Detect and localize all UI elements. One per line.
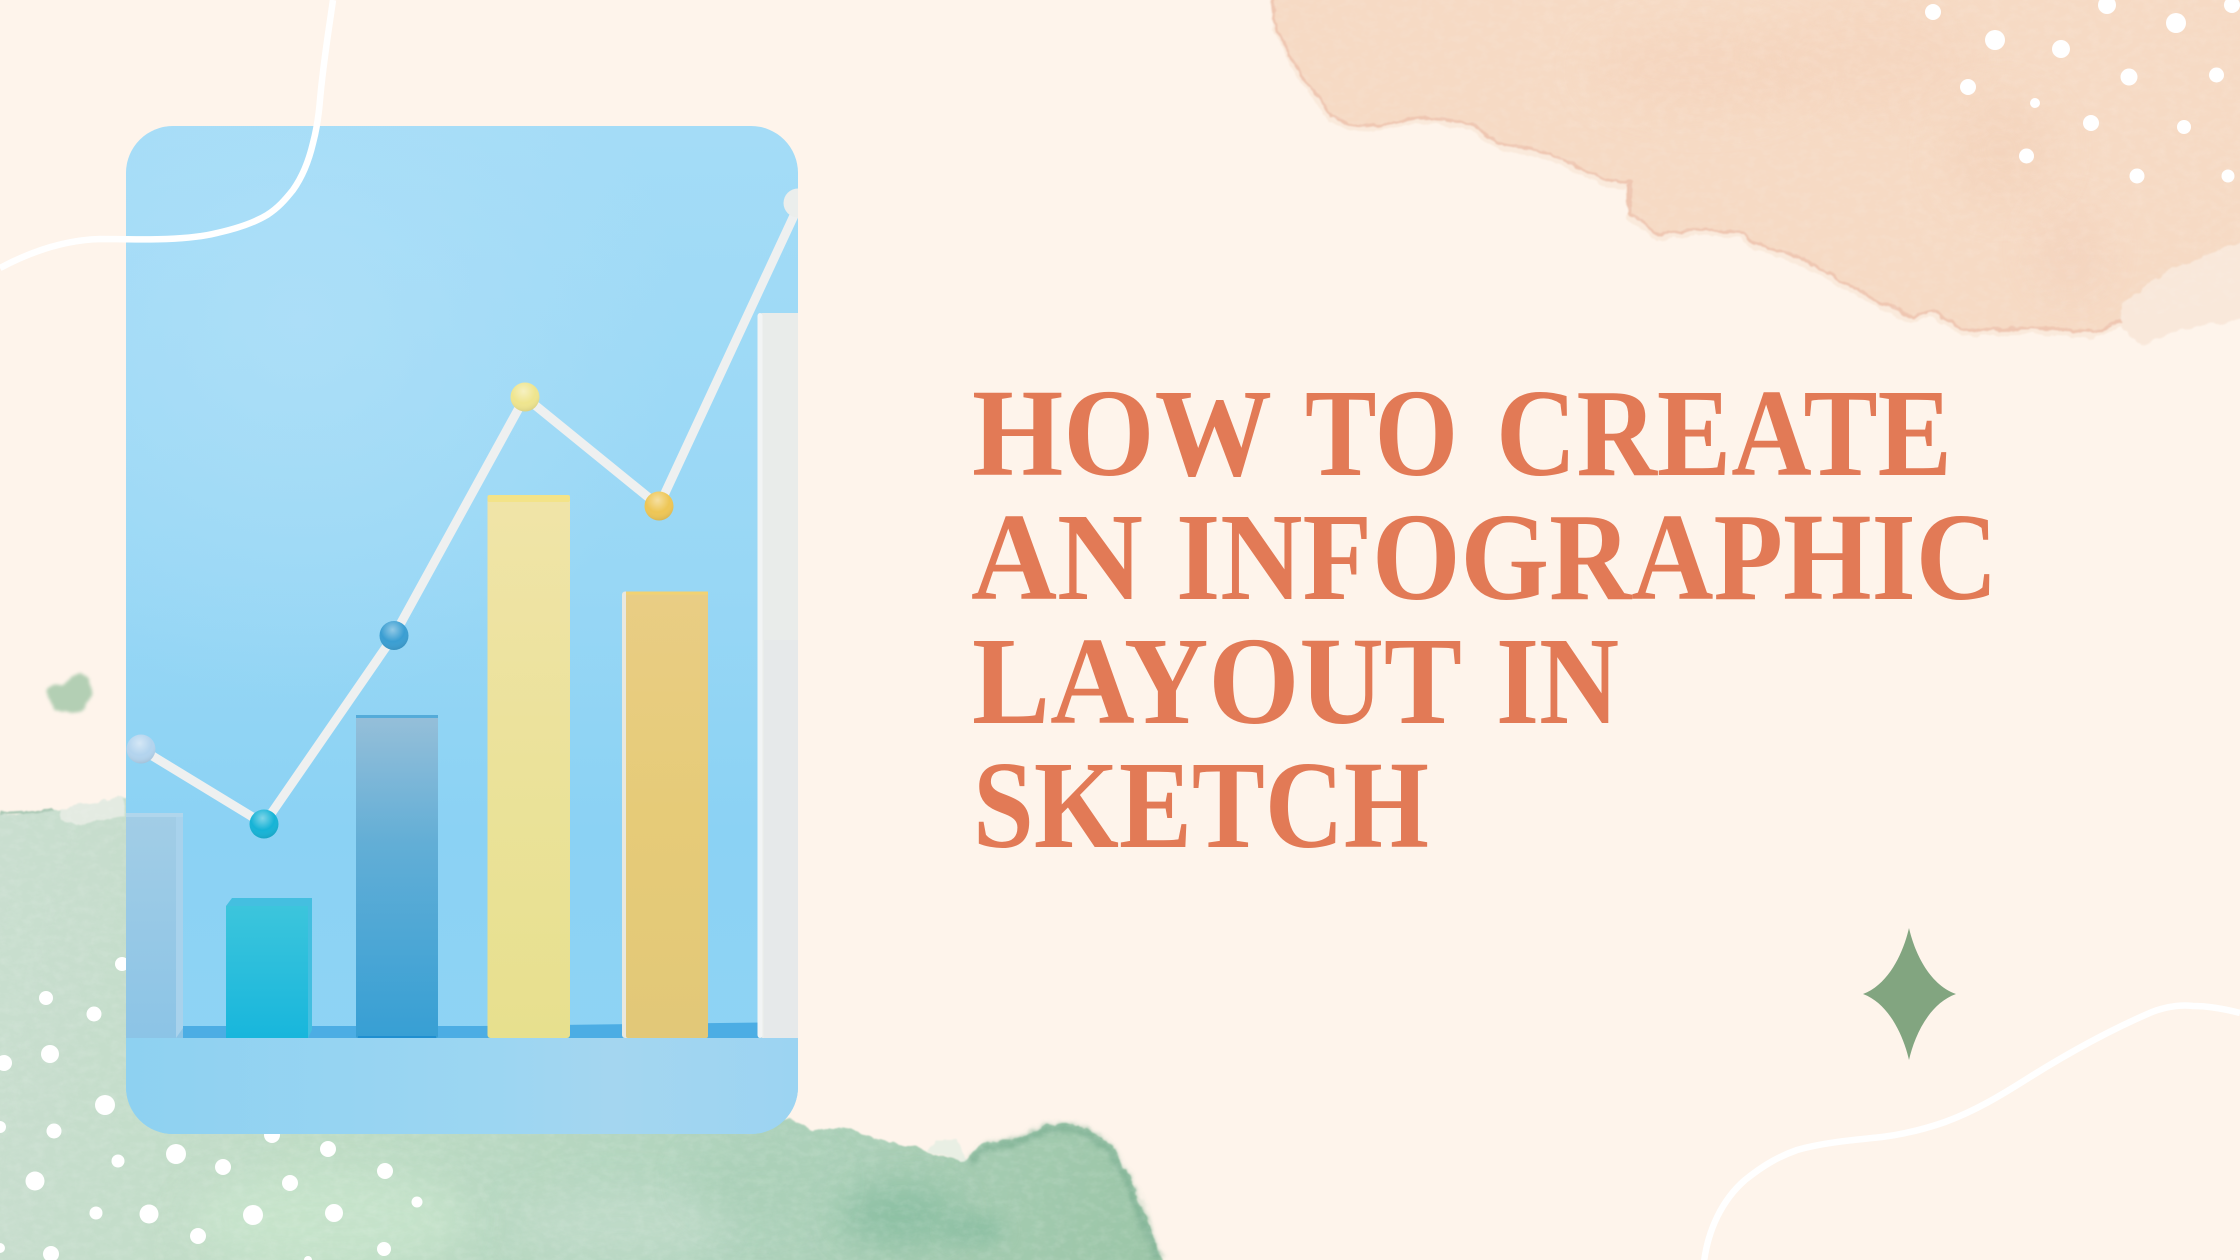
- white curve: bottom right: [1704, 1006, 2240, 1260]
- backdrop glow: [150, 224, 449, 514]
- bar 5: [622, 592, 708, 1038]
- title: IN: [1496, 613, 1619, 751]
- dots: green corner: [0, 957, 422, 1260]
- watercolor: peach top right: [1270, 0, 2240, 345]
- dots: peach corner: [1925, 0, 2240, 184]
- photo backdrop: [126, 126, 798, 1134]
- title: CREATE: [1496, 365, 1952, 503]
- floor: [126, 1038, 798, 1134]
- title: AN: [971, 489, 1143, 627]
- bar 1: [126, 813, 183, 1038]
- white curve: top left: [0, 0, 333, 268]
- title: [971, 365, 1998, 875]
- title: SKETCH: [973, 737, 1429, 875]
- floor shadow band: [183, 1022, 762, 1038]
- bar 3: [356, 715, 438, 1038]
- bar 2: [226, 898, 312, 1038]
- bar 6: [758, 313, 798, 1038]
- title: TO: [1305, 365, 1458, 503]
- chart line: [141, 194, 804, 824]
- watercolor: green bottom left: [0, 790, 1170, 1260]
- title: HOW: [972, 365, 1272, 503]
- title: LAYOUT: [972, 613, 1462, 751]
- bar 4: [488, 495, 570, 1038]
- icon: sparkle star: [1863, 928, 1956, 1060]
- chart nodes: [126, 188, 812, 838]
- watercolor smudge: small green: [48, 674, 91, 713]
- panel: 3D bar chart photo: [126, 126, 818, 1134]
- title: INFOGRAPHIC: [1176, 489, 1998, 627]
